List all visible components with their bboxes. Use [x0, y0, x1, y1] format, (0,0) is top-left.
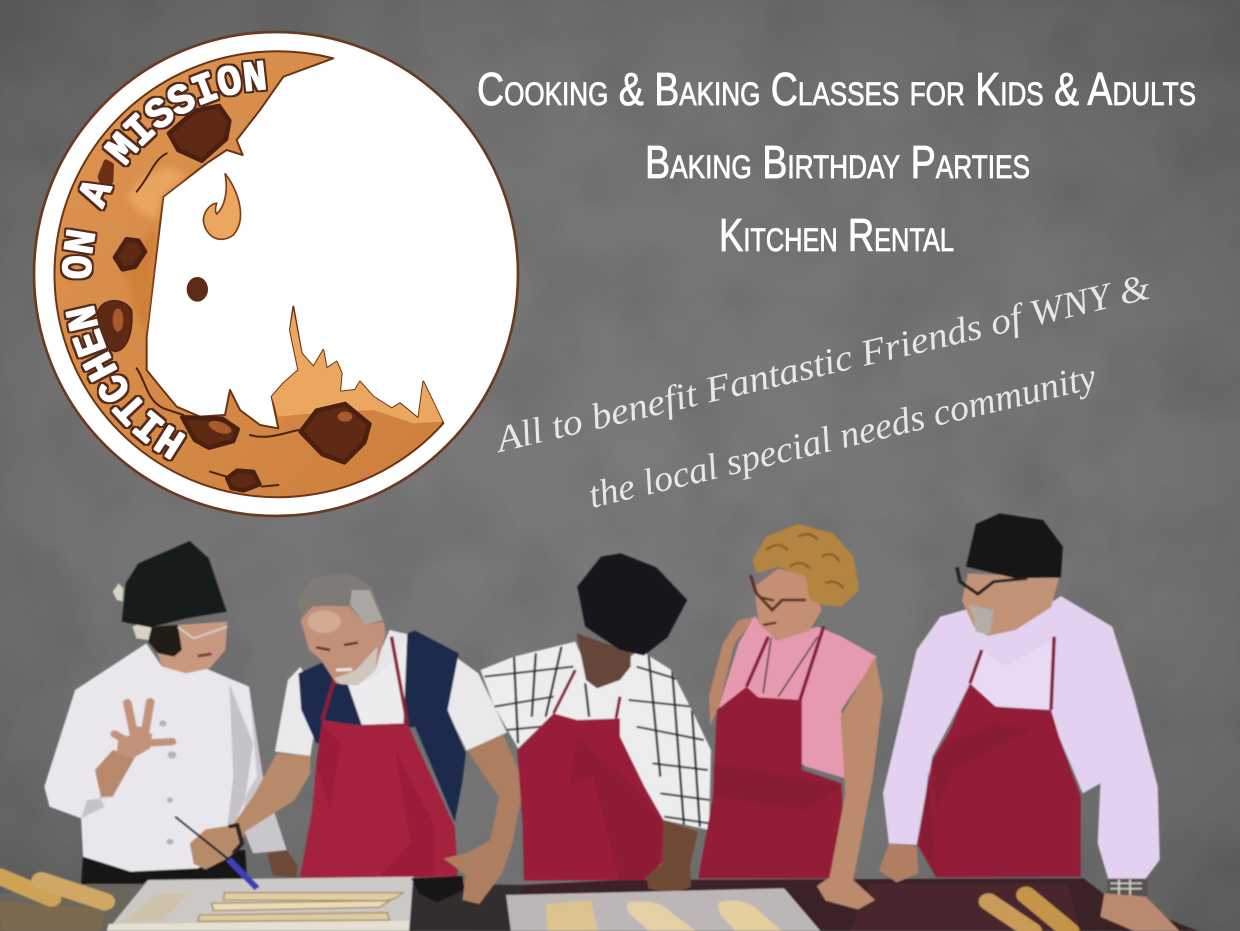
shirt sleeves [275, 653, 507, 756]
lavender shirt [883, 596, 1160, 879]
cookie cracks [137, 153, 298, 487]
apron shade [713, 763, 841, 810]
shirt check lines [484, 647, 710, 827]
chip highlight left [113, 308, 123, 332]
cookie dark side patch [120, 227, 157, 337]
rolling pins left [0, 877, 105, 902]
cookie light upper patch [127, 167, 187, 220]
dough 3 [718, 900, 782, 931]
logo: Kitchen on a Mission badge [32, 30, 520, 518]
tray of dough [107, 877, 413, 931]
tray front lip [107, 921, 409, 931]
palm [117, 733, 152, 758]
face [577, 633, 631, 688]
raised hand [115, 702, 172, 753]
dough 1 [546, 901, 598, 931]
cookie shading, clipped to crescent [120, 167, 187, 337]
person 5: man in lavender shirt [879, 513, 1180, 931]
parchment [506, 888, 820, 931]
shirt front [340, 633, 407, 727]
forearm and hand [646, 820, 698, 894]
chocolate chip small top [100, 162, 112, 185]
curly hair [752, 524, 859, 607]
apron straps [554, 670, 620, 718]
person 4: woman in pink top [698, 524, 883, 909]
right arm [817, 657, 883, 909]
apron straps [970, 637, 1054, 710]
pink top [719, 616, 877, 778]
apron straps [747, 627, 824, 700]
left arm [190, 753, 310, 869]
face [156, 622, 227, 673]
back sleeve [235, 687, 287, 853]
dough strip left [123, 893, 189, 922]
apron [517, 713, 664, 881]
script line two: the local special needs community [585, 356, 1101, 517]
dough strip 1 [223, 893, 403, 901]
glasses [957, 567, 1027, 594]
table [0, 878, 1198, 931]
beard [334, 647, 378, 686]
head [962, 573, 1059, 636]
chocolate chip lower left [182, 417, 238, 448]
glasses [750, 575, 806, 610]
coat fold shadows [81, 683, 253, 843]
rolling pins right [989, 895, 1070, 931]
black bowl [411, 876, 463, 903]
apron folds [316, 723, 435, 877]
right arm and hand [444, 734, 524, 904]
heading: kitchen rental: Kitchen Rental [719, 209, 954, 261]
chocolate chip large [301, 404, 369, 462]
checked shirt [480, 642, 711, 830]
chocolate chip left [98, 301, 132, 352]
hair [148, 625, 182, 657]
apron shade [569, 737, 664, 880]
apron straps [322, 637, 407, 723]
shirt placket shade [970, 640, 1053, 710]
bison eye [187, 277, 208, 302]
chocolate chip top [169, 106, 229, 161]
logo curved text path [91, 89, 269, 436]
logo white disc [34, 32, 518, 516]
logo name text: HITCHEN ON A MISSION [60, 58, 268, 462]
chocolate chip bottom [227, 471, 259, 490]
dough strip 2 [212, 901, 389, 911]
hair [297, 573, 384, 625]
hair light patch [350, 590, 383, 625]
face [754, 568, 822, 641]
pastry brush [175, 817, 257, 888]
apron [917, 683, 1081, 877]
parchment sheet with dough [506, 888, 820, 931]
person 1: woman in chef coat [44, 541, 297, 884]
chip highlight lower [207, 418, 233, 436]
eyes [316, 643, 358, 650]
left arm [709, 617, 756, 727]
chef hat [122, 541, 227, 627]
smile [336, 665, 352, 674]
left hand [879, 843, 919, 882]
cookie light fur highlight [272, 310, 443, 423]
chocolate chip middle [115, 239, 145, 269]
apron [300, 720, 458, 878]
raised forearm [95, 750, 136, 797]
goatee [968, 605, 994, 635]
forehead highlight [308, 610, 341, 633]
person 3: woman in checked shirt [480, 553, 711, 894]
wristwatch [1107, 879, 1147, 897]
apron [698, 687, 846, 878]
photo: five bakers at a table [0, 513, 1198, 931]
hand behind [267, 850, 297, 878]
vest [299, 631, 466, 822]
mouth [198, 654, 212, 656]
right hand [1100, 893, 1180, 931]
chef coat [44, 643, 257, 872]
flowers [113, 583, 151, 640]
tray [107, 877, 413, 931]
coat buttons [159, 720, 176, 845]
eye and mouth [760, 597, 776, 625]
apron shade [921, 723, 1031, 877]
black cap [966, 513, 1063, 578]
chef hat [577, 553, 687, 656]
person 2: man in navy vest and red apron [190, 573, 524, 904]
necklace [763, 637, 818, 697]
hair curls [766, 534, 843, 588]
head [301, 605, 386, 685]
heading: birthday parties: Baking Birthday Parties [645, 136, 1030, 188]
dough strip 3 [198, 913, 389, 921]
flame ear [203, 173, 241, 239]
wrist band [229, 825, 242, 853]
glasses [178, 627, 227, 638]
neck [348, 630, 407, 683]
black trousers [81, 850, 247, 884]
script line one: All to benefit Fantastic Friends of WNY & [490, 267, 1154, 461]
dough 2 [627, 901, 696, 931]
chip highlight large [338, 412, 352, 422]
cookie crescent [55, 51, 443, 497]
